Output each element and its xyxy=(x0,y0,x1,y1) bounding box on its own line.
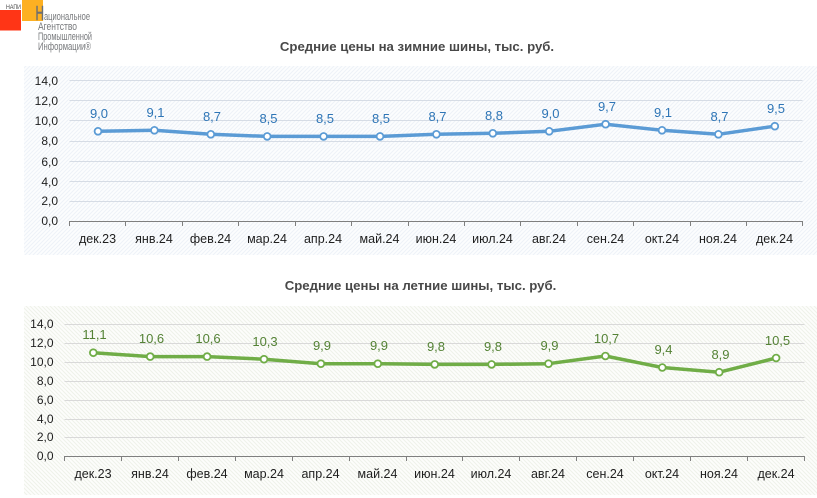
x axis labels: дек.24 xyxy=(757,467,795,481)
summer price line xyxy=(93,353,776,372)
x axis labels: окт.24 xyxy=(645,467,679,481)
panel: summer tires chart xyxy=(24,306,817,495)
x axis labels: май.24 xyxy=(358,467,397,481)
x axis labels: мар.24 xyxy=(247,232,287,246)
x axis labels: июл.24 xyxy=(471,467,511,481)
x axis labels: авг.24 xyxy=(531,467,565,481)
logo: agency name: Агентство xyxy=(38,21,77,33)
logo: red square xyxy=(0,10,21,30)
summer value labels: 9,9 xyxy=(313,338,331,353)
logo: agency name: Информации® xyxy=(38,41,91,53)
summer value labels: 9,9 xyxy=(370,338,388,353)
y axis labels xyxy=(30,317,54,463)
summer value labels: 9,4 xyxy=(654,342,673,357)
winter value labels: 9,7 xyxy=(598,99,616,114)
logo: small abbreviation: НАПИ xyxy=(6,5,21,11)
x axis labels: дек.23 xyxy=(74,467,112,481)
logo: orange square xyxy=(22,0,43,21)
title: summer tires: Средние цены на летние шины, тыс. руб. xyxy=(285,278,556,293)
x axis labels: фев.24 xyxy=(186,467,228,481)
x axis labels: дек.23 xyxy=(79,232,116,246)
x axis labels: июн.24 xyxy=(416,232,456,246)
winter value labels: 8,7 xyxy=(203,109,221,124)
summer value labels: 9,8 xyxy=(484,339,502,354)
y axis labels: 8,0 xyxy=(37,374,54,388)
y axis labels: 6,0 xyxy=(41,155,58,169)
y axis labels: 14,0 xyxy=(30,317,54,331)
y axis labels: 0,0 xyxy=(41,214,58,228)
winter value labels: 9,0 xyxy=(90,106,108,121)
logo: agency name: Промышленной xyxy=(38,31,92,43)
logo: agency name xyxy=(38,11,92,53)
logo: agency name: ациональное xyxy=(44,11,90,23)
x axis labels: авг.24 xyxy=(532,232,566,246)
x axis labels: мар.24 xyxy=(244,467,284,481)
winter value labels: 9,1 xyxy=(146,105,165,120)
y axis labels xyxy=(35,74,58,228)
y axis labels: 4,0 xyxy=(41,175,58,189)
y axis labels: 8,0 xyxy=(41,134,58,148)
summer value labels: 10,7 xyxy=(594,331,619,346)
x axis xyxy=(70,222,802,226)
winter price markers xyxy=(95,121,778,140)
x axis labels: окт.24 xyxy=(645,232,679,246)
winter value labels: 8,7 xyxy=(710,109,729,124)
title: winter tires: Средние цены на зимние шины, тыс. руб. xyxy=(280,39,554,54)
summer value labels: 8,9 xyxy=(711,347,730,362)
summer value labels xyxy=(82,327,790,362)
winter value labels: 8,5 xyxy=(372,111,390,126)
panel: winter tires chart xyxy=(24,66,817,255)
panel background xyxy=(24,66,817,255)
summer price markers xyxy=(90,349,779,376)
summer value labels: 9,8 xyxy=(427,339,445,354)
x axis labels: май.24 xyxy=(360,232,399,246)
summer value labels: 10,6 xyxy=(139,331,164,346)
winter value labels: 8,8 xyxy=(485,108,503,123)
x axis labels: июл.24 xyxy=(472,232,513,246)
y axis labels: 0,0 xyxy=(37,449,54,463)
panel background xyxy=(24,306,817,495)
x axis labels: ноя.24 xyxy=(700,467,738,481)
x axis labels: июн.24 xyxy=(414,467,455,481)
logo xyxy=(0,0,92,53)
y axis labels: 10,0 xyxy=(35,114,58,128)
winter value labels: 9,0 xyxy=(541,106,560,121)
winter value labels: 8,5 xyxy=(259,111,278,126)
y axis labels: 12,0 xyxy=(30,336,54,350)
x axis labels xyxy=(79,232,793,246)
x axis labels: дек.24 xyxy=(756,232,793,246)
summer value labels: 11,1 xyxy=(82,327,107,342)
y axis labels: 2,0 xyxy=(41,194,58,208)
y axis labels: 4,0 xyxy=(37,412,54,426)
summer value labels: 9,9 xyxy=(540,338,559,353)
y axis labels: 14,0 xyxy=(35,74,58,88)
x axis labels: сен.24 xyxy=(587,232,624,246)
x axis labels: апр.24 xyxy=(301,467,340,481)
x axis labels xyxy=(74,467,795,481)
logo: large letter: Н xyxy=(36,3,44,25)
x axis labels: янв.24 xyxy=(131,467,169,481)
winter value labels xyxy=(90,99,785,126)
winter value labels: 8,7 xyxy=(428,109,447,124)
x axis labels: янв.24 xyxy=(135,232,173,246)
y axis labels: 10,0 xyxy=(30,355,54,369)
summer value labels: 10,5 xyxy=(765,333,790,348)
x axis labels: фев.24 xyxy=(190,232,231,246)
x axis labels: сен.24 xyxy=(586,467,624,481)
winter price line xyxy=(98,124,775,136)
x axis labels: ноя.24 xyxy=(699,232,737,246)
winter value labels: 9,5 xyxy=(767,101,785,116)
x axis xyxy=(64,456,804,461)
summer value labels: 10,6 xyxy=(195,331,221,346)
summer value labels: 10,3 xyxy=(252,334,278,349)
y axis labels: 6,0 xyxy=(37,393,54,407)
y axis labels: 12,0 xyxy=(35,94,58,108)
x axis labels: апр.24 xyxy=(304,232,342,246)
winter value labels: 8,5 xyxy=(316,111,334,126)
winter value labels: 9,1 xyxy=(654,105,672,120)
y axis labels: 2,0 xyxy=(37,430,54,444)
